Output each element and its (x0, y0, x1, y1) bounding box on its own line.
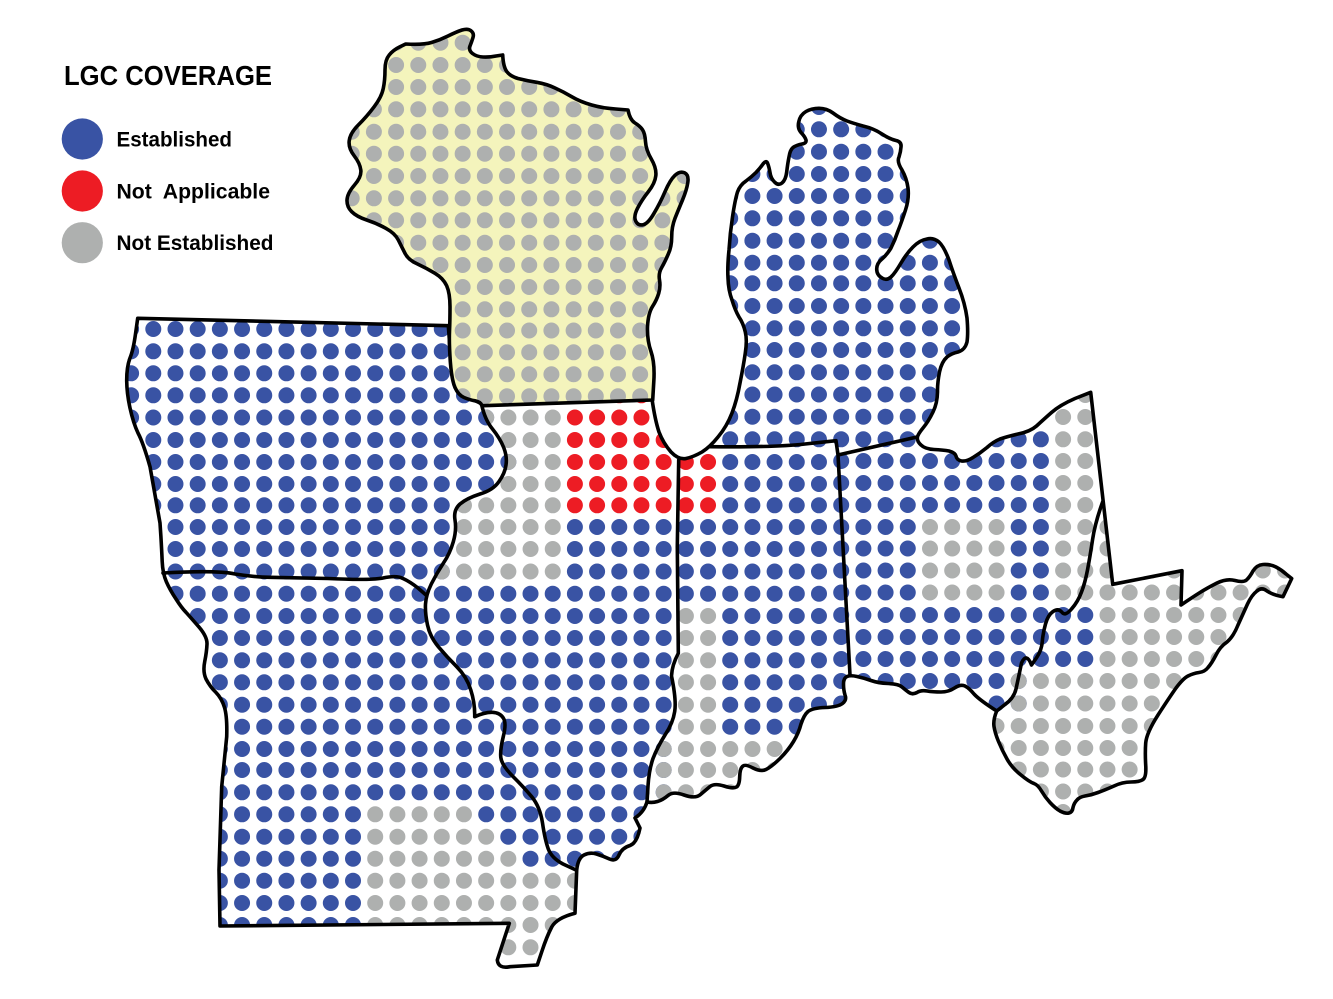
state borders: Michigan, Indiana and Ohio (710, 437, 917, 675)
not established dots: Ohio, West Virginia (930, 395, 1286, 812)
legend item: not established (62, 222, 273, 263)
legend item: established: Established (116, 129, 232, 152)
state borders: Ohio and West Virginia (997, 502, 1103, 711)
legend item: not applicable (62, 170, 270, 212)
dot grid: Iowa, Missouri, Illinois, Indiana, Michigan, Ohio, West Virginia (131, 107, 1286, 947)
not established dots: southern Missouri (375, 814, 576, 947)
established dots: Ohio (841, 461, 1086, 704)
state outline: outer boundary (127, 108, 1292, 967)
state borders: Mississippi River (425, 405, 576, 870)
not applicable dots: Chicago area (575, 395, 709, 505)
state borders: Iowa and Missouri (163, 572, 426, 595)
not established dots: northwest Illinois (442, 395, 554, 572)
legend item: established (62, 118, 232, 160)
legend (62, 118, 273, 263)
state borders: Illinois and Indiana (647, 460, 679, 802)
not established dots: southern Indiana (656, 608, 783, 799)
established dots: Michigan (730, 107, 1042, 439)
legend item: not established: Not Established (116, 232, 274, 255)
title: LGC COVERAGE (64, 60, 272, 91)
legend item: not applicable: Not Applicable (116, 180, 270, 204)
Wisconsin: pale yellow state with not established dots (347, 29, 688, 406)
established dots: western states (131, 329, 820, 925)
